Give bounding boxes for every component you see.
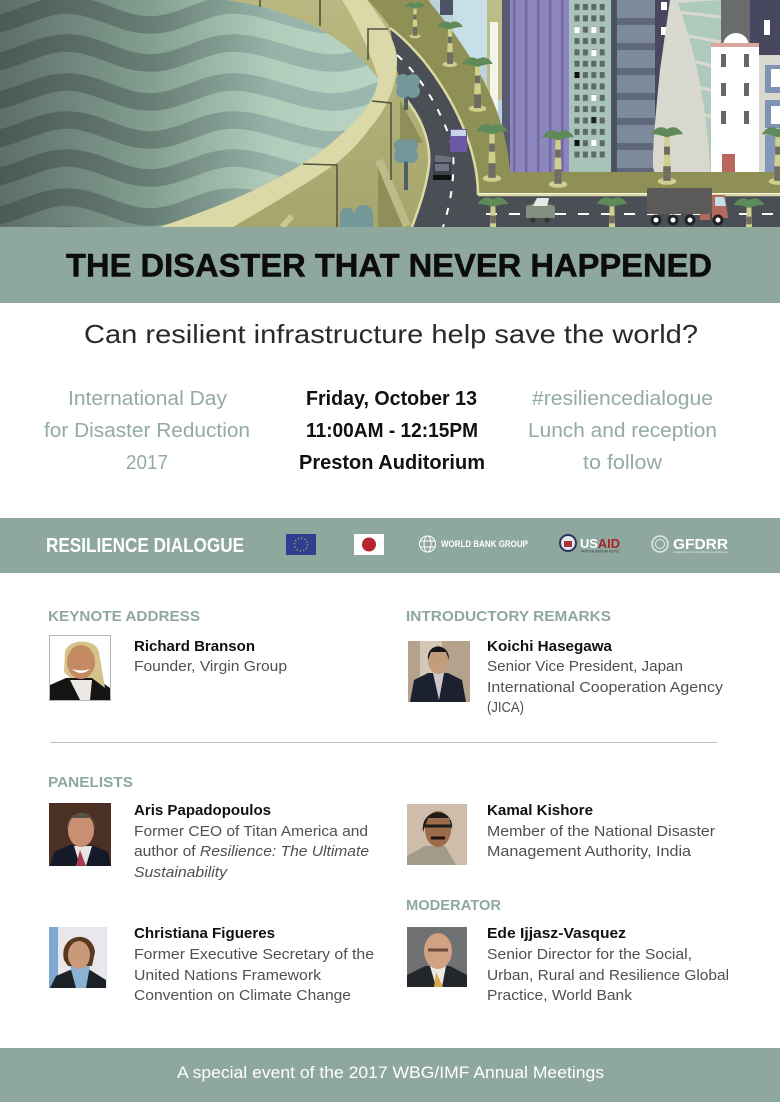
heading: introductory remarks: INTRODUCTORY REMARKS xyxy=(406,608,611,625)
speaker: Kamal Kishore: Member of the National Disaster xyxy=(487,823,715,840)
speaker: Kamal Kishore: Kamal Kishore xyxy=(487,802,593,819)
photo: Richard Branson xyxy=(50,636,110,700)
date, time and place: 11:00AM - 12:15PM xyxy=(306,420,478,442)
speaker: Kamal Kishore xyxy=(487,802,715,860)
heading: keynote address: KEYNOTE ADDRESS xyxy=(48,608,200,625)
footer xyxy=(0,1048,780,1102)
logo: GFDRR: GFDRR xyxy=(673,536,728,553)
speaker: Ede Ijjasz-Vasquez: Senior Director for the Social, xyxy=(487,946,692,963)
icon: EU flag xyxy=(286,534,316,555)
divider xyxy=(50,742,717,743)
speaker: Ede Ijjasz-Vasquez xyxy=(487,925,729,1004)
photo: Aris Papadopoulos xyxy=(49,803,111,866)
speaker: Aris Papadopoulos: Former CEO of Titan America and xyxy=(134,823,368,840)
speaker: Koichi Hasegawa: (JICA) xyxy=(487,699,524,716)
speaker: Koichi Hasegawa: International Cooperation Agency xyxy=(487,679,724,696)
photo: Kamal Kishore xyxy=(407,804,467,865)
date, time and place: Friday, October 13 xyxy=(306,388,477,410)
event context: International Day xyxy=(68,388,227,410)
speaker: Christiana Figueres: United Nations Framework xyxy=(134,967,322,984)
heading: moderator: MODERATOR xyxy=(406,897,501,914)
speaker: Richard Branson: Founder, Virgin Group xyxy=(134,658,287,675)
illustration: land and hill xyxy=(150,0,780,227)
hero illustration xyxy=(0,0,780,227)
illustration: teal trees xyxy=(340,74,420,227)
speaker: Ede Ijjasz-Vasquez: Practice, World Bank xyxy=(487,987,633,1004)
speaker: Ede Ijjasz-Vasquez: Urban, Rural and Resilience Global xyxy=(487,967,729,984)
logo: World Bank Group: WORLD BANK GROUP xyxy=(441,539,528,549)
event context xyxy=(44,388,250,474)
logo: GFDRR: Global Facility for Disaster Reduction and Recovery xyxy=(673,550,728,554)
speaker: Aris Papadopoulos: Aris Papadopoulos xyxy=(134,802,271,819)
illustration: palm trees xyxy=(405,2,780,227)
speaker: Koichi Hasegawa xyxy=(487,638,724,716)
heading: panelists: PANELISTS xyxy=(48,774,133,791)
illustration: road xyxy=(390,28,780,227)
hashtag and reception: to follow xyxy=(583,452,663,474)
brand name: RESILIENCE DIALOGUE xyxy=(46,535,244,557)
event context: 2017 xyxy=(126,452,168,474)
date, time and place xyxy=(299,388,485,474)
partner band xyxy=(0,518,780,573)
illustration: skyline xyxy=(425,0,780,175)
speaker: Richard Branson xyxy=(134,638,287,675)
date, time and place: Preston Auditorium xyxy=(299,452,485,474)
speaker: Christiana Figueres: Former Executive Secretary of the xyxy=(134,946,374,963)
logo: GFDRR xyxy=(652,536,728,554)
logo: USAID: FROM THE AMERICAN PEOPLE xyxy=(581,550,619,554)
footer: A special event of the 2017 WBG/IMF Annual Meetings xyxy=(177,1063,604,1082)
logo: USAID: USAID xyxy=(580,536,620,551)
speaker: Koichi Hasegawa: Senior Vice President, Japan xyxy=(487,658,683,675)
speaker: Kamal Kishore: Management Authority, India xyxy=(487,843,692,860)
event context: for Disaster Reduction xyxy=(44,420,250,442)
illustration: retaining wall posts xyxy=(260,0,391,227)
photo: Ede Ijjasz-Vasquez xyxy=(407,927,467,987)
speaker: Christiana Figueres: Convention on Climate Change xyxy=(134,987,351,1004)
illustration: vehicles xyxy=(433,129,728,224)
logo: USAID xyxy=(560,535,620,554)
speaker: Richard Branson: Richard Branson xyxy=(134,638,255,655)
hashtag and reception: #resiliencedialogue xyxy=(532,388,713,410)
illustration: embankment rim xyxy=(160,0,397,227)
speaker: Koichi Hasegawa: Koichi Hasegawa xyxy=(487,638,613,655)
speaker: Christiana Figueres: Christiana Figueres xyxy=(134,925,275,942)
photo: Christiana Figueres xyxy=(49,927,107,988)
logo: World Bank Group xyxy=(420,536,528,552)
title: THE DISASTER THAT NEVER HAPPENED xyxy=(66,248,712,284)
speaker: Aris Papadopoulos: Sustainability xyxy=(134,864,229,881)
speaker: Aris Papadopoulos xyxy=(134,802,369,881)
photo: Koichi Hasegawa xyxy=(408,641,470,702)
hashtag and reception xyxy=(528,388,717,474)
icon: Japan flag xyxy=(354,534,384,555)
illustration: white building xyxy=(711,33,759,172)
speaker: Aris Papadopoulos: author of Resilience: The Ultimate xyxy=(134,843,369,860)
speaker: Ede Ijjasz-Vasquez: Ede Ijjasz-Vasquez xyxy=(487,925,626,942)
hashtag and reception: Lunch and reception xyxy=(528,420,717,442)
illustration: water waves xyxy=(0,0,378,227)
speaker: Christiana Figueres xyxy=(134,925,374,1004)
title band xyxy=(0,227,780,303)
subtitle: Can resilient infrastructure help save the world? xyxy=(84,319,698,349)
